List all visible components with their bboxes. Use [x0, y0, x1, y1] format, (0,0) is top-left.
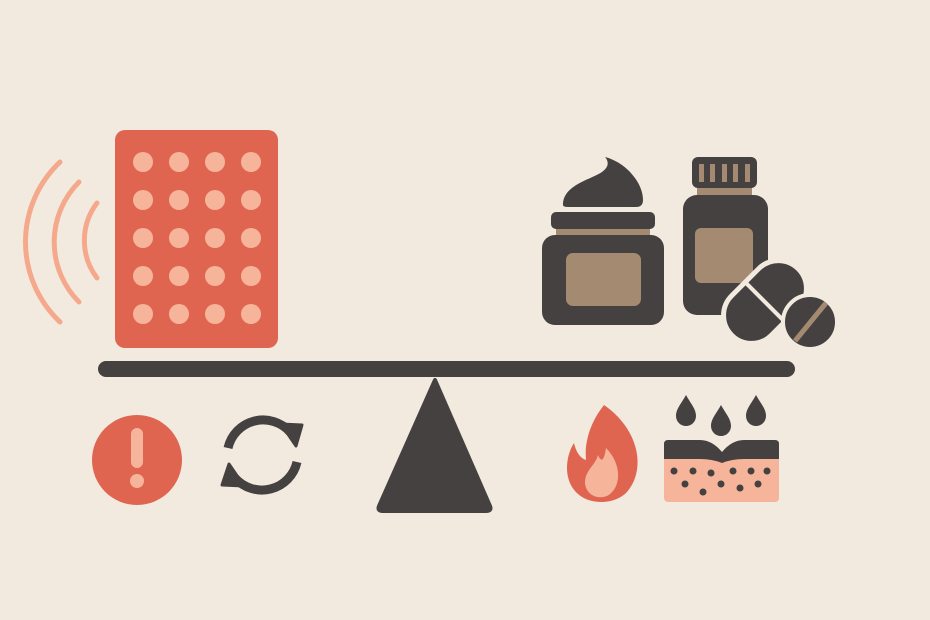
icon: pill blister pack — [115, 130, 278, 348]
icon: refresh cycle — [222, 420, 302, 490]
icon: warning exclamation — [92, 415, 182, 505]
icon: vibration waves — [25, 162, 97, 322]
fulcrum triangle — [378, 380, 490, 511]
icon: medicine bottle — [683, 157, 768, 315]
icon: capsule and tablet — [712, 249, 837, 355]
seesaw beam — [98, 361, 795, 377]
icon: flame — [567, 405, 638, 502]
icon: skin layers with drops — [664, 395, 779, 502]
icon: cream jar — [542, 157, 664, 325]
